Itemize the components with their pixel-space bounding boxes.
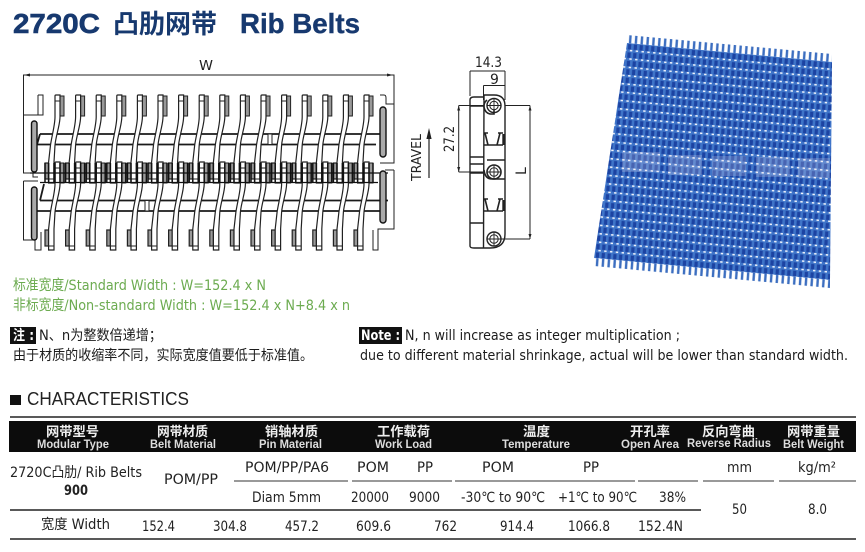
link profile — [470, 95, 505, 248]
title: Rib Belts — [240, 8, 360, 39]
title: 2720C — [13, 8, 100, 39]
dimension: L — [500, 106, 532, 239]
width formulas: 标准宽度/Standard Width : W=152.4 x N — [13, 277, 266, 294]
table body rows: 304.8 — [213, 519, 247, 535]
note: English: N, n will increase as integer multiplication ; — [405, 328, 680, 344]
table header: 开孔率 — [630, 424, 670, 439]
table body rows: kg/m² — [798, 460, 836, 476]
table header: 网带重量 — [787, 424, 840, 439]
interlocking hinge zone — [30, 163, 388, 183]
title: 凸肋网带 — [113, 4, 217, 41]
table body rows: 152.4N — [638, 519, 683, 535]
TRAVEL arrow: TRAVEL — [410, 133, 425, 182]
table body rows: 900 — [64, 483, 88, 499]
table body rows: -30℃ to 90℃ — [461, 490, 545, 506]
note: English — [359, 327, 848, 364]
cross bars — [34, 134, 388, 211]
table body rows: 457.2 — [285, 519, 319, 535]
title — [13, 4, 360, 41]
table header: 反向弯曲 — [702, 424, 755, 439]
table header: Temperature — [502, 437, 570, 451]
table body rows: mm — [727, 460, 752, 476]
dimension: L: L — [514, 167, 530, 175]
table body rows: 50 — [732, 502, 747, 518]
table body rows: 38% — [659, 490, 686, 506]
note: English: Note : — [361, 328, 400, 344]
dimension: 14.3: 14.3 — [475, 55, 502, 71]
table header: 网带材质 — [157, 424, 208, 439]
table header — [9, 421, 856, 452]
table header: Reverse Radius — [687, 436, 771, 450]
section heading: CHARACTERISTICS — [27, 389, 189, 409]
chain row 1 fingers — [45, 95, 373, 183]
table body rows: PP — [583, 460, 599, 476]
table body rows: 宽度 Width — [41, 516, 110, 533]
table body rows: 762 — [434, 519, 457, 535]
table body rows: POM/PP/PA6 — [245, 460, 329, 476]
note: Chinese — [10, 327, 313, 364]
dimension: W — [24, 59, 394, 115]
table body rows — [10, 460, 856, 539]
table body rows: 152.4 — [142, 519, 175, 535]
side-view drawing — [410, 55, 532, 248]
table body rows: 8.0 — [808, 502, 827, 518]
TRAVEL arrow — [410, 128, 432, 182]
table body rows: 1066.8 — [568, 519, 610, 535]
table header: Belt Weight — [783, 437, 844, 451]
table body rows: 2720C凸肋/ Rib Belts — [10, 465, 142, 481]
table body rows: 914.4 — [500, 519, 534, 535]
table body rows: PP — [417, 460, 433, 476]
dimension: 27.2 — [442, 106, 484, 172]
note: Chinese: 注 : — [13, 327, 34, 344]
right edge module — [373, 95, 394, 250]
width formulas — [13, 277, 350, 314]
dimension: 14.3 — [470, 55, 505, 100]
table header: 网带型号 — [46, 424, 99, 439]
table header: 温度 — [523, 424, 550, 439]
table body rows: 20000 — [351, 490, 389, 506]
left edge module — [24, 95, 43, 250]
characteristics table — [9, 417, 856, 539]
width formulas: 非标宽度/Non-standard Width : W=152.4 x N+8.4 x n — [13, 297, 350, 314]
table header: 销轴材质 — [265, 424, 318, 439]
note: Chinese: 由于材质的收缩率不同，实际宽度值要低于标准值。 — [13, 347, 313, 364]
table header: Work Load — [375, 437, 432, 451]
note: Chinese: N、n为整数倍递增； — [39, 328, 162, 344]
table header: Belt Material — [150, 437, 216, 451]
table body rows: POM — [357, 460, 389, 476]
table body rows: POM — [482, 460, 514, 476]
dimension: W: W — [199, 59, 213, 74]
table body rows: +1℃ to 90℃ — [558, 490, 637, 506]
watermark band — [622, 152, 830, 178]
table body rows: Diam 5mm — [252, 490, 321, 506]
dimension: 9: 9 — [490, 72, 499, 88]
chain row 2 fingers — [45, 162, 373, 250]
table header: 工作载荷 — [377, 424, 430, 439]
table body rows: 609.6 — [356, 519, 391, 535]
table header: Pin Material — [259, 437, 322, 451]
belt top-view drawing — [24, 59, 394, 250]
dimension: 9 — [484, 72, 505, 100]
photo: blue modular belt — [594, 35, 832, 288]
table body rows: 9000 — [409, 490, 440, 506]
dimension: 27.2: 27.2 — [442, 126, 458, 152]
table body rows: POM/PP — [164, 472, 218, 488]
table header: Modular Type — [37, 437, 109, 451]
table header: Open Area — [621, 437, 679, 451]
